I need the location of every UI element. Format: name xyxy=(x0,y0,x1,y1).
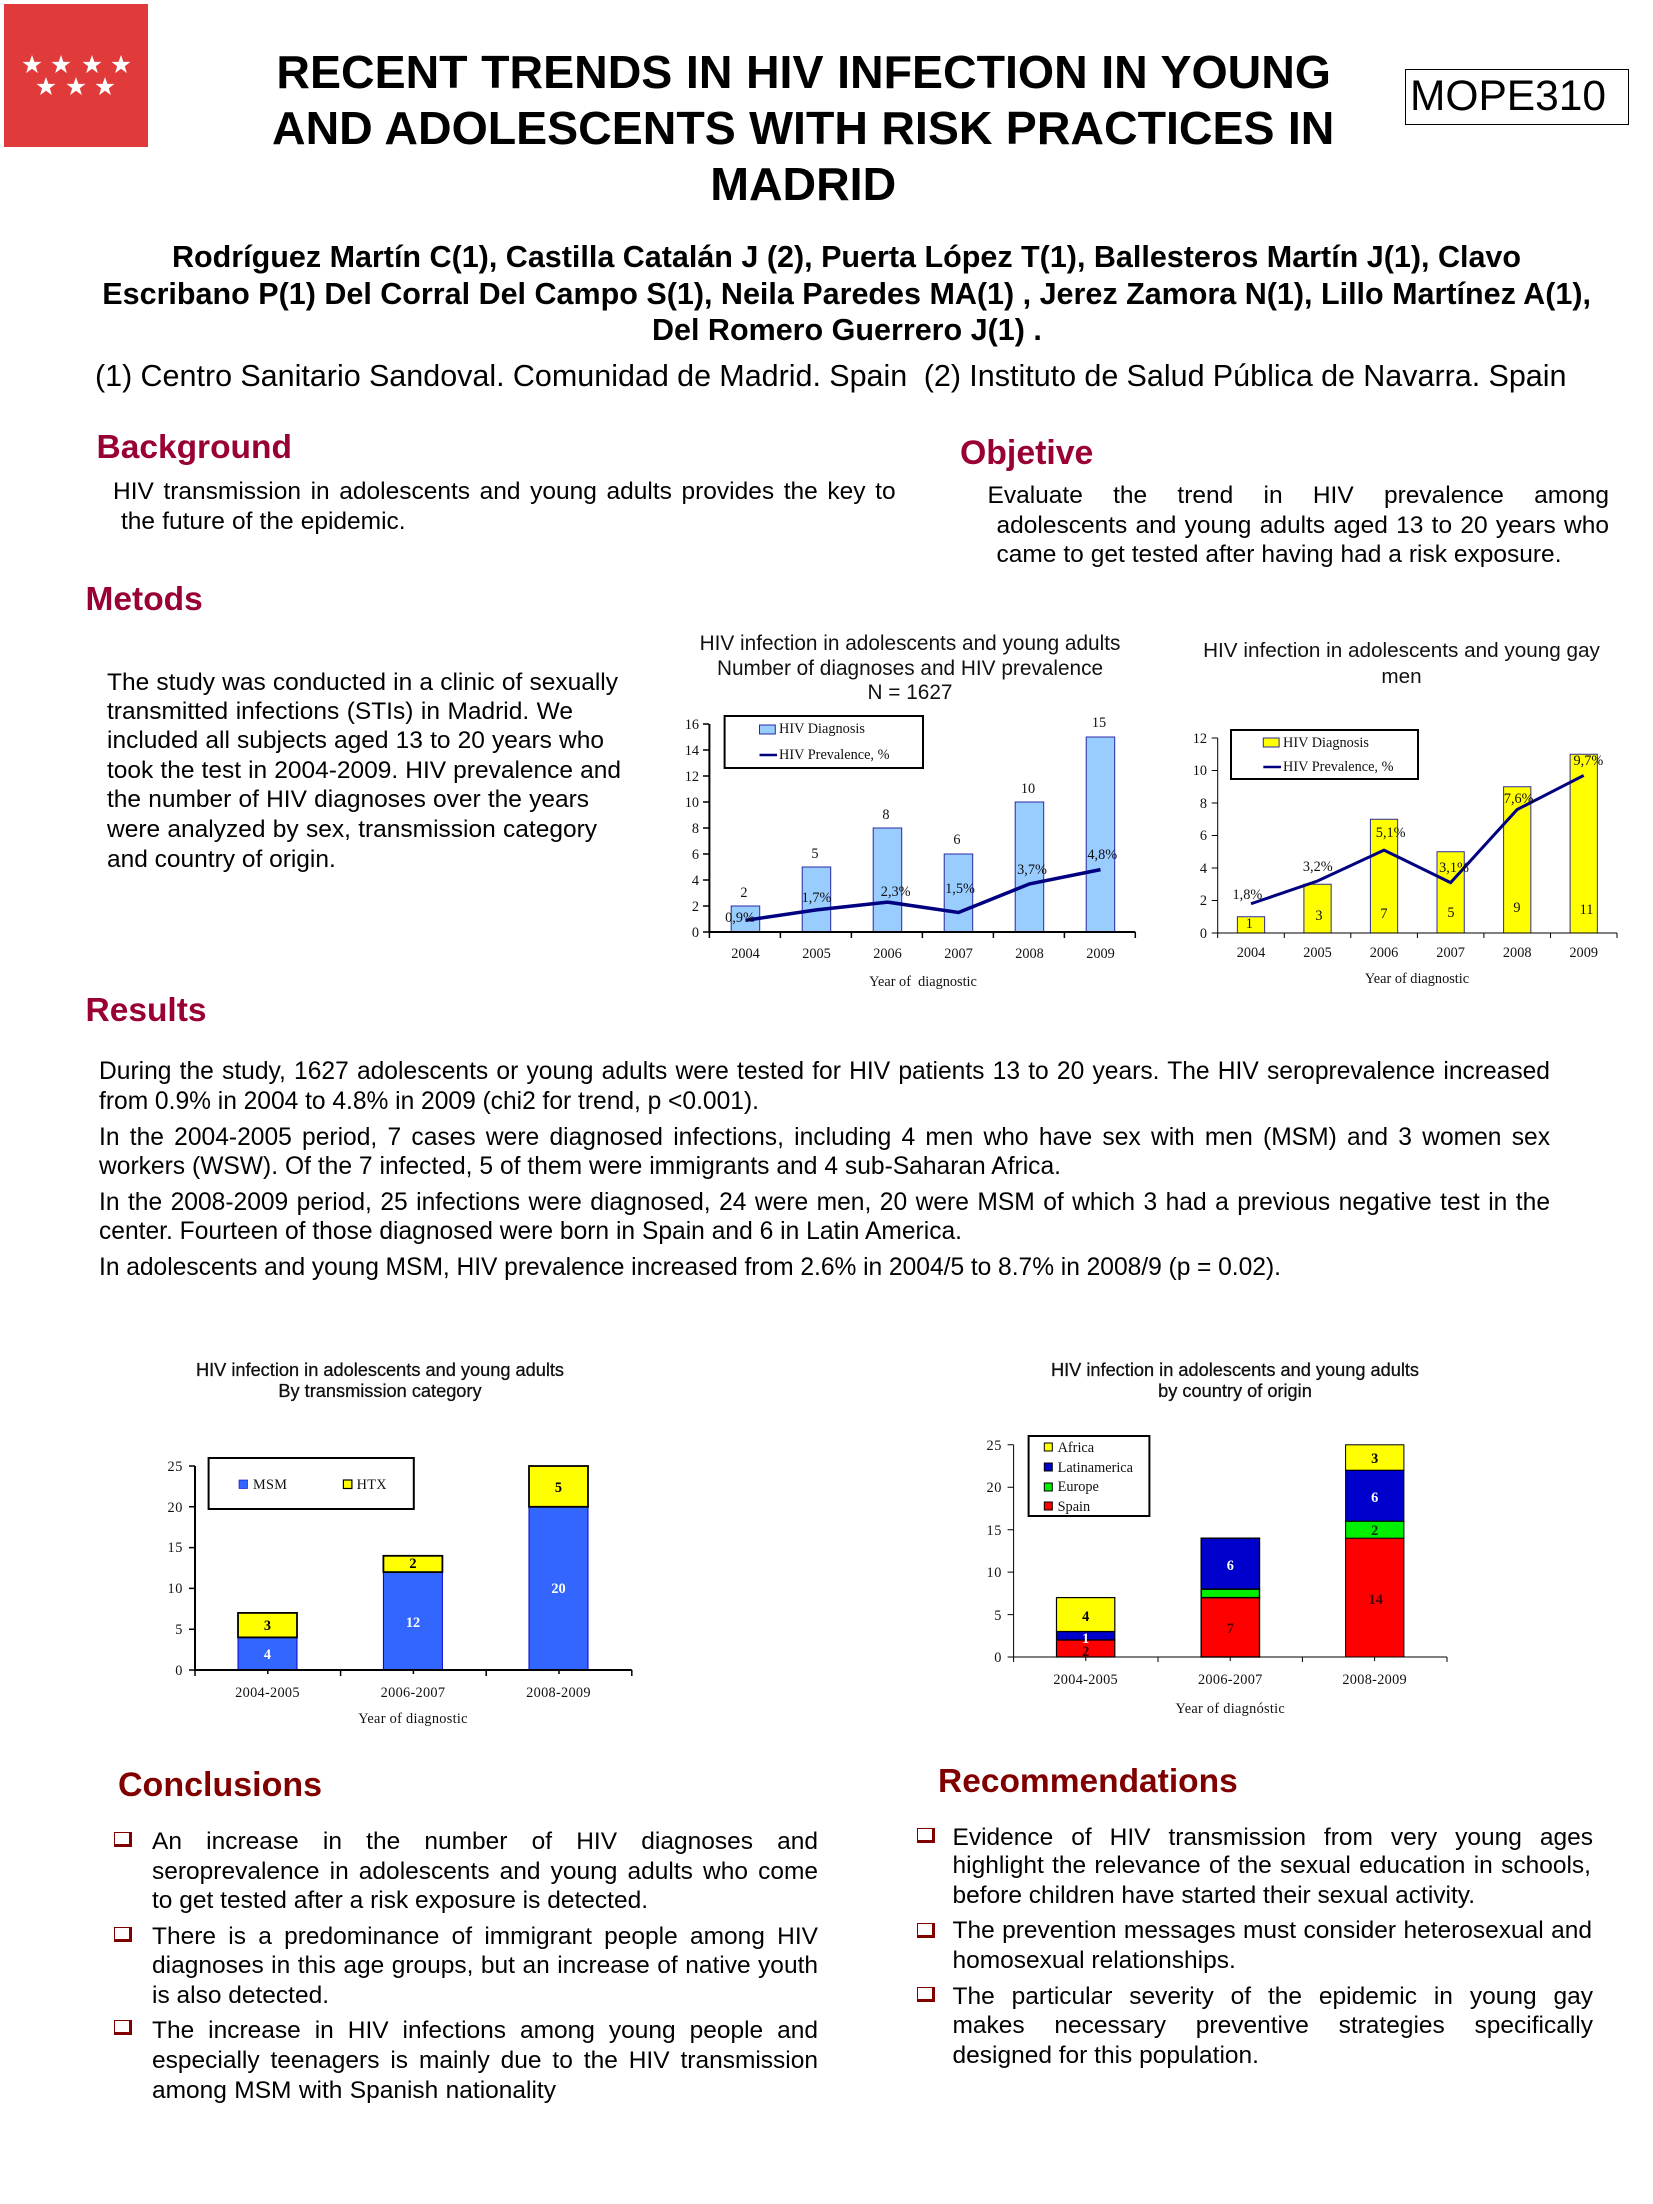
y axis labels: 10 xyxy=(685,795,699,811)
bar value labels: 1 xyxy=(1246,916,1253,932)
x axis labels xyxy=(731,946,1115,990)
recommendation 3 xyxy=(917,1983,1593,2069)
bar value labels: 7 xyxy=(1380,906,1388,922)
prevalence labels: 1,7% xyxy=(802,890,831,906)
x axis labels: 2008 xyxy=(1503,945,1531,961)
legend: Latinamerica xyxy=(1058,1460,1134,1476)
authors xyxy=(102,240,1591,347)
stacked bar 2008-2009 xyxy=(1346,1445,1404,1657)
axes xyxy=(189,1466,632,1676)
y axis labels: 14 xyxy=(685,743,699,759)
conclusion 3: The increase in HIV infections among young people and xyxy=(152,2017,818,2044)
chart: by country of origin xyxy=(986,1360,1448,1717)
y axis labels: 0 xyxy=(692,925,699,941)
heading: Results: Results xyxy=(86,992,207,1029)
y axis labels: 5 xyxy=(994,1608,1002,1624)
bars: HIV diagnosis xyxy=(731,737,1115,932)
recommendation 3: The particular severity of the epidemic in young gay xyxy=(952,1983,1593,2010)
x axis labels: 2006-2007 xyxy=(381,1685,445,1701)
bar value labels: 12 xyxy=(406,1615,420,1631)
x axis labels xyxy=(235,1685,591,1727)
text: results: from 0.9% in 2004 to 4.8% in 2009 (chi2 for trend, p <0.001). xyxy=(99,1088,759,1115)
heading: Objetive: Objetive xyxy=(960,434,1093,472)
conclusion 2 xyxy=(114,1923,818,2009)
text: methods: included all subjects aged 13 to 20 years who xyxy=(107,726,604,754)
chart title: Number of diagnoses and HIV prevalence xyxy=(717,657,1103,680)
conclusion 2: diagnoses in this age groups, but an increase of native youth xyxy=(152,1952,818,1979)
text: results xyxy=(99,1058,1550,1281)
bar value labels: 2 xyxy=(1371,1523,1378,1539)
bar value labels: 14 xyxy=(1369,1592,1383,1608)
title: AND ADOLESCENTS WITH RISK PRACTICES IN xyxy=(272,102,1334,154)
text: results: In the 2004-2005 period, 7 cases were diagnosed infections, including 4 men who have sex with men (MSM) and 3 women sex xyxy=(99,1124,1550,1151)
text: results: center. Fourteen of those diagnosed were born in Spain and 6 in Latin America. xyxy=(99,1218,962,1245)
bar value labels: 6 xyxy=(953,832,961,848)
x axis labels: 2008-2009 xyxy=(526,1685,591,1701)
legend xyxy=(1029,1436,1149,1516)
text: methods xyxy=(107,668,621,872)
y axis labels: 25 xyxy=(168,1459,183,1475)
text: results: During the study, 1627 adolescents or young adults were tested for HIV patients 13 to 20 years. The HIV seroprevalence increased xyxy=(99,1058,1550,1085)
title: RECENT TRENDS IN HIV INFECTION IN YOUNG xyxy=(276,46,1331,98)
legend: Spain xyxy=(1058,1499,1090,1515)
y axis labels: 5 xyxy=(175,1622,183,1638)
line: HIV prevalence xyxy=(1251,775,1584,904)
x axis labels: 2006 xyxy=(1370,945,1398,961)
authors: Rodríguez Martín C(1), Castilla Catalán J (2), Puerta López T(1), Ballesteros Martín J(1), Clavo xyxy=(172,240,1521,274)
bars: MSM xyxy=(238,1507,588,1670)
recommendation 1: highlight the relevance of the sexual education in schools, xyxy=(952,1852,1591,1879)
y axis labels xyxy=(685,717,699,941)
x axis labels: 2005 xyxy=(1303,945,1332,961)
x axis labels: 2005 xyxy=(802,946,831,962)
text: objective xyxy=(988,482,1609,568)
prevalence labels: 1,8% xyxy=(1233,887,1262,903)
x axis labels: Year of diagnostic xyxy=(358,1711,468,1727)
prevalence labels: 7,6% xyxy=(1504,791,1534,807)
prevalence labels: 3,7% xyxy=(1017,862,1047,878)
bar value labels: 4 xyxy=(1082,1609,1089,1625)
affiliations: (1) Centro Sanitario Sandoval. Comunidad de Madrid. Spain (2) Instituto de Salud Pública de Navarra. Spain xyxy=(95,358,1566,392)
prevalence labels: 3,2% xyxy=(1303,859,1333,875)
axes xyxy=(1008,1445,1447,1662)
x axis labels xyxy=(1237,945,1598,987)
y axis labels: 20 xyxy=(986,1480,1002,1496)
bar value labels xyxy=(1082,1451,1383,1660)
x axis labels: 2004-2005 xyxy=(1053,1672,1118,1688)
text: objective: came to get tested after having had a risk exposure. xyxy=(996,541,1562,568)
text: objective: Evaluate the trend in HIV prevalence among xyxy=(988,482,1609,509)
bar value labels: 15 xyxy=(1092,715,1106,731)
bar value labels: 3 xyxy=(1371,1451,1378,1467)
recommendation 2 xyxy=(917,1917,1592,1974)
chart title: HIV infection in adolescents and young adults xyxy=(1051,1360,1419,1380)
chart title: HIV infection in adolescents and young adults xyxy=(196,1360,564,1380)
y axis labels xyxy=(168,1459,183,1679)
x axis labels: 2009 xyxy=(1569,945,1598,961)
y axis labels: 10 xyxy=(1193,763,1207,779)
conclusion 3: especially teenagers is mainly due to the HIV transmission xyxy=(152,2047,818,2074)
recommendation 1 xyxy=(917,1824,1593,1909)
chart title: By transmission category xyxy=(278,1381,482,1401)
y axis labels: 12 xyxy=(685,769,699,785)
bar value labels: 2 xyxy=(740,885,748,901)
x axis labels: 2006-2007 xyxy=(1198,1672,1263,1688)
chart: HIV diagnoses and prevalence, all adolescents xyxy=(685,632,1136,990)
x axis labels: 2004 xyxy=(731,946,760,962)
title: MADRID xyxy=(710,158,896,210)
chart title xyxy=(1051,1360,1419,1401)
bar value labels xyxy=(1246,900,1593,932)
legend: HIV Prevalence, % xyxy=(1283,759,1394,775)
x axis labels: 2008 xyxy=(1015,946,1044,962)
y axis labels: 6 xyxy=(692,847,699,863)
stacked bar 2006-2007 xyxy=(1201,1538,1260,1657)
y axis labels: 12 xyxy=(1193,731,1207,747)
y axis labels: 15 xyxy=(168,1540,183,1556)
bar value labels: 10 xyxy=(1021,781,1035,797)
y axis labels: 15 xyxy=(986,1523,1002,1539)
chart title xyxy=(1203,639,1601,688)
legend: Europe xyxy=(1058,1479,1099,1495)
y axis labels: 25 xyxy=(986,1438,1002,1454)
legend: HIV Prevalence, % xyxy=(779,747,890,763)
legend xyxy=(209,1458,414,1509)
x axis labels: 2004 xyxy=(1237,945,1265,961)
bar value labels: 3 xyxy=(264,1618,271,1634)
bar value labels: 2 xyxy=(1082,1644,1089,1660)
recommendation 3: designed for this population. xyxy=(952,2042,1259,2069)
chart title: N = 1627 xyxy=(868,681,952,704)
y axis labels: 8 xyxy=(692,821,699,837)
y axis labels: 0 xyxy=(175,1663,183,1679)
legend: MSM xyxy=(253,1477,287,1493)
x axis labels xyxy=(1053,1672,1407,1717)
bar value labels: 1 xyxy=(1082,1631,1089,1647)
conclusion 3 xyxy=(114,2017,818,2104)
text: results: In adolescents and young MSM, HIV prevalence increased from 2.6% in 2004/5 to 8.7% in 2008/9 (p = 0.02). xyxy=(99,1254,1281,1281)
heading: Recommendations: Recommendations xyxy=(938,1763,1238,1800)
text: results: In the 2008-2009 period, 25 infections were diagnosed, 24 were men, 20 were MSM of which 3 had a previous negative test in the xyxy=(99,1189,1550,1216)
conclusion 1: An increase in the number of HIV diagnoses and xyxy=(152,1828,818,1855)
bars: HIV diagnosis xyxy=(1237,754,1597,933)
recommendation 1: Evidence of HIV transmission from very young ages xyxy=(952,1824,1593,1851)
legend xyxy=(725,716,923,768)
x axis labels: Year of diagnostic xyxy=(1365,971,1469,987)
y axis labels: 6 xyxy=(1200,828,1207,844)
legend: HIV Diagnosis xyxy=(779,721,865,737)
recommendation 2: homosexual relationships. xyxy=(952,1947,1236,1974)
bar value labels: 11 xyxy=(1580,902,1593,918)
legend: Africa xyxy=(1058,1440,1095,1456)
y axis labels xyxy=(1193,731,1207,942)
bar value labels: 5 xyxy=(555,1480,562,1496)
text: background xyxy=(113,478,896,535)
conclusion 2: is also detected. xyxy=(152,1982,329,2009)
x axis labels: 2004-2005 xyxy=(235,1685,300,1701)
prevalence labels: 5,1% xyxy=(1376,825,1406,841)
chart title: men xyxy=(1381,665,1422,688)
logo: Comunidad de Madrid red flag with stars xyxy=(4,4,148,147)
bar value labels: 20 xyxy=(551,1581,566,1597)
title xyxy=(272,46,1334,210)
axes xyxy=(703,724,1135,938)
text: results: workers (WSW). Of the 7 infected, 5 of them were immigrants and 4 sub-Saharan Africa. xyxy=(99,1153,1061,1180)
legend: HTX xyxy=(357,1477,387,1493)
conclusion 3: among MSM with Spanish nationality xyxy=(152,2077,556,2104)
conclusion 1 xyxy=(114,1828,818,1914)
recommendation 3: makes necessary preventive strategies specifically xyxy=(952,2012,1593,2039)
bar value labels: 5 xyxy=(1447,905,1455,921)
y axis labels: 8 xyxy=(1200,796,1207,812)
poster code box: MOPE310 xyxy=(1410,73,1606,120)
prevalence labels xyxy=(1233,753,1603,903)
text: methods: took the test in 2004-2009. HIV prevalence and xyxy=(107,756,621,784)
line: HIV prevalence xyxy=(746,870,1100,920)
prevalence labels: 9,7% xyxy=(1574,753,1603,769)
y axis labels xyxy=(986,1438,1002,1666)
y axis labels: 4 xyxy=(1200,861,1207,877)
conclusion 2: There is a predominance of immigrant people among HIV xyxy=(152,1923,818,1950)
text: methods: and country of origin. xyxy=(107,846,336,872)
recommendation 1: before children have started their sexual activity. xyxy=(952,1882,1475,1909)
text: background: the future of the epidemic. xyxy=(121,508,406,535)
y axis labels: 16 xyxy=(685,717,699,733)
y axis labels: 20 xyxy=(168,1500,183,1516)
chart: by transmission category xyxy=(168,1360,633,1727)
x axis labels: 2008-2009 xyxy=(1342,1672,1407,1688)
text: methods: transmitted infections (STIs) in Madrid. We xyxy=(107,698,573,724)
y axis labels: 2 xyxy=(1200,893,1207,909)
text: background: HIV transmission in adolescents and young adults provides the key to xyxy=(113,478,896,505)
text: methods: were analyzed by sex, transmission category xyxy=(107,816,597,842)
bar value labels: 6 xyxy=(1371,1490,1378,1506)
chart: HIV diagnoses and prevalence, young gay men xyxy=(1193,639,1618,987)
legend: HIV Diagnosis xyxy=(1283,735,1369,751)
chart title xyxy=(700,632,1120,704)
authors: Del Romero Guerrero J(1) . xyxy=(652,313,1042,347)
x axis labels: 2009 xyxy=(1086,946,1115,962)
y axis labels: 4 xyxy=(692,873,699,889)
bar value labels: 5 xyxy=(811,846,819,862)
x axis labels: Year of diagnóstic xyxy=(1176,1701,1285,1717)
y axis labels: 10 xyxy=(168,1581,183,1597)
chart title xyxy=(196,1360,564,1401)
bar value labels: 6 xyxy=(1227,1558,1234,1574)
text: objective: adolescents and young adults aged 13 to 20 years who xyxy=(996,512,1609,539)
text: methods: the number of HIV diagnoses over the years xyxy=(107,786,589,812)
bar value labels: 8 xyxy=(882,807,890,823)
prevalence labels: 2,3% xyxy=(881,884,911,900)
prevalence labels: 0,9% xyxy=(725,910,755,926)
bar value labels: 2 xyxy=(409,1556,417,1572)
y axis labels: 2 xyxy=(692,899,699,915)
text: methods: The study was conducted in a clinic of sexually xyxy=(107,668,618,696)
panel: recommendations list xyxy=(917,1824,1593,2069)
y axis labels: 0 xyxy=(1200,926,1207,942)
y axis labels: 10 xyxy=(986,1565,1002,1581)
chart title: HIV infection in adolescents and young gay xyxy=(1203,639,1601,662)
bar value labels: 9 xyxy=(1513,900,1521,916)
recommendation 2: The prevention messages must consider heterosexual and xyxy=(952,1917,1592,1944)
bar value labels: 7 xyxy=(1227,1621,1234,1637)
prevalence labels: 1,5% xyxy=(945,881,975,897)
prevalence labels: 3,1% xyxy=(1439,860,1469,876)
prevalence labels xyxy=(725,847,1117,926)
conclusion 1: to get tested after a risk exposure is detected. xyxy=(152,1887,648,1914)
bar value labels: 4 xyxy=(264,1647,271,1663)
heading: Conclusions: Conclusions xyxy=(118,1766,322,1804)
authors: Escribano P(1) Del Corral Del Campo S(1), Neila Paredes MA(1) , Jerez Zamora N(1), Lillo Martínez A(1), xyxy=(102,277,1591,311)
heading: Metods: Metods xyxy=(86,581,203,618)
stacked bar 2004-2005 xyxy=(1056,1598,1115,1657)
bar value labels: 3 xyxy=(1315,908,1323,924)
bar value labels xyxy=(264,1480,566,1663)
x axis labels: 2007 xyxy=(1436,945,1465,961)
legend xyxy=(1231,730,1418,779)
bars: HTX xyxy=(238,1466,588,1637)
bar value labels xyxy=(740,715,1106,901)
conclusion 1: seroprevalence in adolescents and young adults who come xyxy=(152,1858,818,1885)
prevalence labels: 4,8% xyxy=(1087,847,1117,863)
axes xyxy=(1212,738,1617,938)
y axis labels: 0 xyxy=(994,1650,1002,1666)
panel: conclusions list xyxy=(114,1828,818,2104)
x axis labels: 2006 xyxy=(873,946,902,962)
chart title: HIV infection in adolescents and young adults xyxy=(700,632,1120,655)
x axis labels: Year of diagnostic xyxy=(869,974,977,990)
chart title: by country of origin xyxy=(1158,1381,1312,1401)
heading: Background: Background xyxy=(96,429,292,466)
x axis labels: 2007 xyxy=(944,946,973,962)
